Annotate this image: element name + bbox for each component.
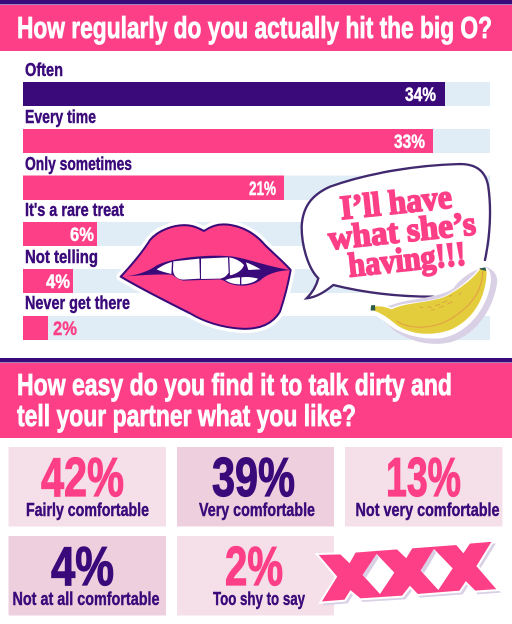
tile: not very comfortable 13%: 13% (386, 446, 461, 508)
tile: very comfortable 39%: Very comfortable (199, 500, 315, 520)
bar: not telling 4%: 4% (46, 272, 70, 293)
bar: rare treat 6% (23, 200, 490, 246)
bubble text: what she’s (326, 205, 477, 258)
bar: only sometimes 21%: 21% (249, 179, 276, 200)
speech bubble (302, 164, 490, 300)
tile: not at all comfortable 4%: Not at all comfortable (12, 589, 160, 609)
tile: too shy to say 2%: Too shy to say (213, 589, 305, 609)
icon: lips biting (121, 224, 291, 329)
tile: not at all comfortable 4%: 4% (51, 535, 114, 597)
tile: fairly comfortable 42%: 42% (41, 446, 124, 508)
bar: every time 33%: 33% (394, 132, 425, 153)
header: talk dirty question (0, 358, 512, 438)
bubble text (323, 177, 481, 286)
bar: only sometimes 21%: Only sometimes (25, 154, 132, 174)
header: orgasm question (0, 0, 512, 51)
bar: rare treat 6%: It's a rare treat (25, 200, 124, 220)
tile: fairly comfortable 42% (8, 446, 166, 526)
tile: too shy to say 2%: 2% (225, 535, 283, 597)
bar: every time 33% (23, 107, 490, 153)
tile: fairly comfortable 42%: Fairly comfortable (26, 500, 149, 520)
icon: banana (369, 266, 497, 344)
icon: XXX (317, 541, 501, 605)
bar: often 34%: 34% (405, 85, 436, 106)
bubble text: I’ll have (338, 179, 454, 227)
tile: very comfortable 39% (177, 446, 334, 526)
bar: not telling 4%: Not telling (25, 247, 98, 267)
header: talk dirty question: tell your partner what you like? (17, 398, 356, 433)
bar: never get there 2%: 2% (53, 319, 77, 340)
bar: every time 33%: Every time (25, 107, 96, 127)
tile: not very comfortable 13% (345, 446, 502, 526)
tile: too shy to say 2% (177, 535, 334, 616)
bubble text: having!!! (346, 236, 468, 285)
bar: never get there 2%: Never get there (25, 293, 130, 313)
tile: not at all comfortable 4% (8, 535, 166, 616)
bar: often 34% (23, 60, 490, 106)
bar chart: how often (23, 60, 490, 340)
tile: very comfortable 39%: 39% (212, 446, 295, 508)
bar: rare treat 6%: 6% (70, 225, 94, 246)
bar: not telling 4% (23, 247, 490, 293)
bar: only sometimes 21% (23, 154, 490, 200)
bar: often 34%: Often (25, 60, 63, 80)
bar: never get there 2% (23, 293, 490, 340)
